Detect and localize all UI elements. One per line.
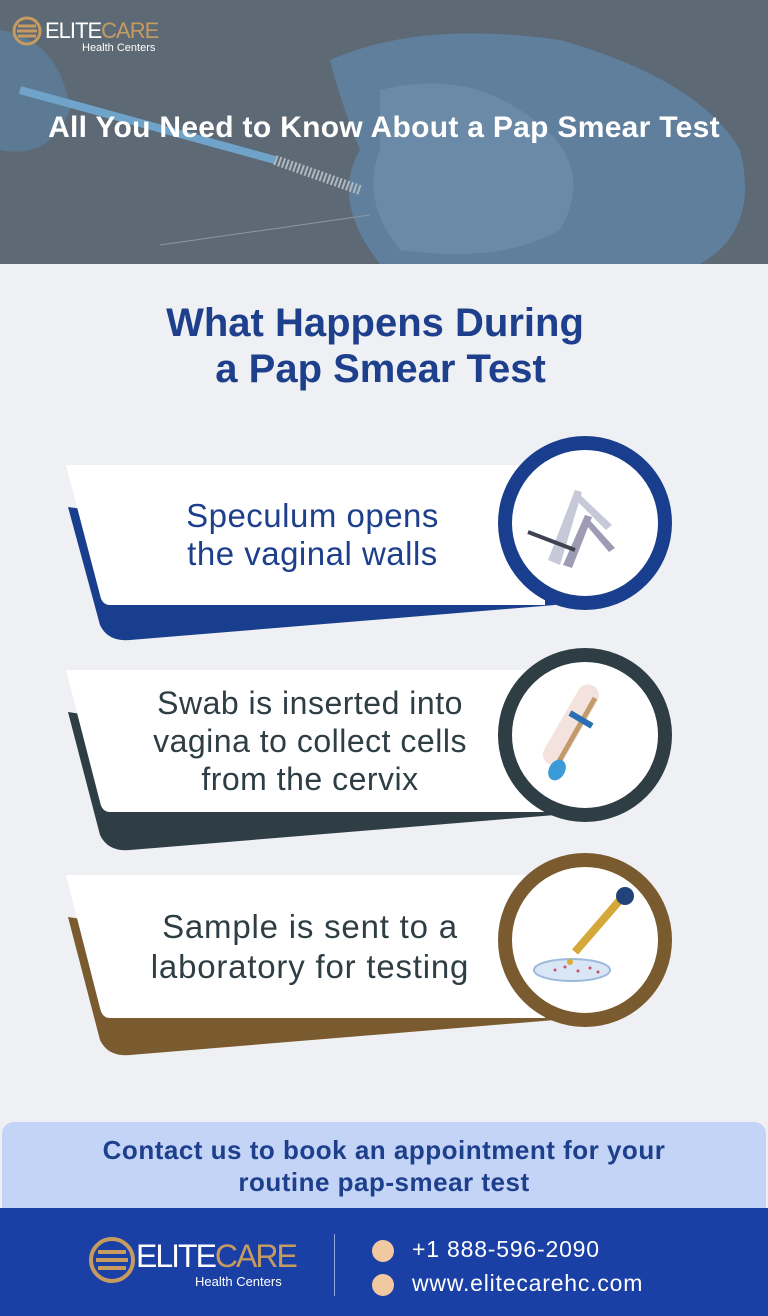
step texts <box>186 497 439 572</box>
title: All You Need to Know About a Pap Smear Test <box>48 111 720 144</box>
step 3 <box>66 860 665 1055</box>
logo: footer: ELITECARE <box>136 1238 296 1274</box>
contact band: Contact us to book an appointment for your <box>103 1135 665 1165</box>
text: laboratory for testing <box>151 948 469 985</box>
contact info: www.elitecarehc.com <box>412 1270 643 1296</box>
contact band <box>2 1122 766 1212</box>
text: from the cervix <box>201 761 419 797</box>
contact band: routine pap-smear test <box>238 1167 530 1197</box>
logo: header <box>12 16 158 54</box>
section heading: a Pap Smear Test <box>215 347 546 391</box>
header banner <box>0 0 768 264</box>
text: vagina to collect cells <box>153 723 467 759</box>
text: Sample is sent to a <box>162 908 458 945</box>
logo: footer <box>89 1237 296 1289</box>
logo: header: ELITECARE <box>45 18 158 43</box>
step texts: Speculum opens <box>186 497 439 534</box>
section heading: What Happens During <box>166 301 584 345</box>
steps graphic <box>66 436 672 1056</box>
step texts: the vaginal walls <box>187 535 438 572</box>
step 1 <box>66 443 665 640</box>
contact info: +1 888-596-2090 <box>412 1236 600 1262</box>
step 2 <box>66 655 665 850</box>
footer <box>0 1208 768 1316</box>
logo: header: Health Centers <box>82 42 155 54</box>
contact info <box>372 1236 643 1296</box>
text: Swab is inserted into <box>157 685 463 721</box>
section heading <box>166 301 584 391</box>
logo: footer: Health Centers <box>195 1274 282 1289</box>
